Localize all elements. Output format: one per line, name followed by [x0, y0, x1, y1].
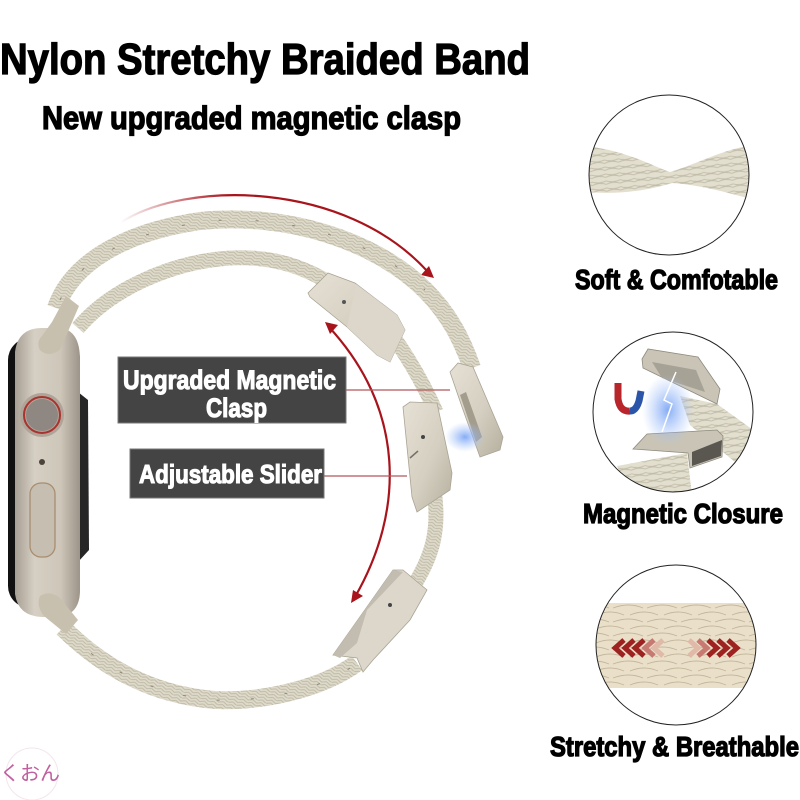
title: Nylon Stretchy Braided Band: [0, 35, 530, 84]
callout: upgraded magnetic clasp: Upgraded Magnetic: [123, 365, 336, 395]
clasp: open magnetic half: [450, 363, 503, 457]
callout: upgraded magnetic clasp: Clasp: [206, 393, 267, 423]
watermark: くおん: [0, 763, 60, 785]
callout: upgraded magnetic clasp: [118, 357, 450, 423]
subtitle: New upgraded magnetic clasp: [42, 100, 461, 136]
clasp: upper slider: [308, 273, 405, 362]
clasp: adjustable slider: [403, 402, 452, 512]
clasp: magnetic glow: [445, 422, 485, 452]
sizing arc double arrow: [325, 322, 390, 603]
watch body: [8, 296, 89, 634]
watch band loop: [56, 219, 472, 700]
clasp: lower slider: [333, 570, 427, 672]
watch crown: [20, 393, 64, 437]
panel: magnetic closure: [583, 332, 783, 529]
icon: stretch chevrons: [615, 640, 737, 656]
icon: horseshoe magnet: [618, 383, 641, 411]
panel: stretchy and breathable: [550, 565, 799, 762]
callout: adjustable slider: [130, 449, 407, 498]
stretch arc arrow: top: [120, 195, 434, 278]
side button: [30, 483, 55, 557]
callout: adjustable slider: Adjustable Slider: [139, 459, 322, 489]
panel: soft and comfortable: [575, 95, 778, 295]
watermark: [0, 748, 60, 800]
